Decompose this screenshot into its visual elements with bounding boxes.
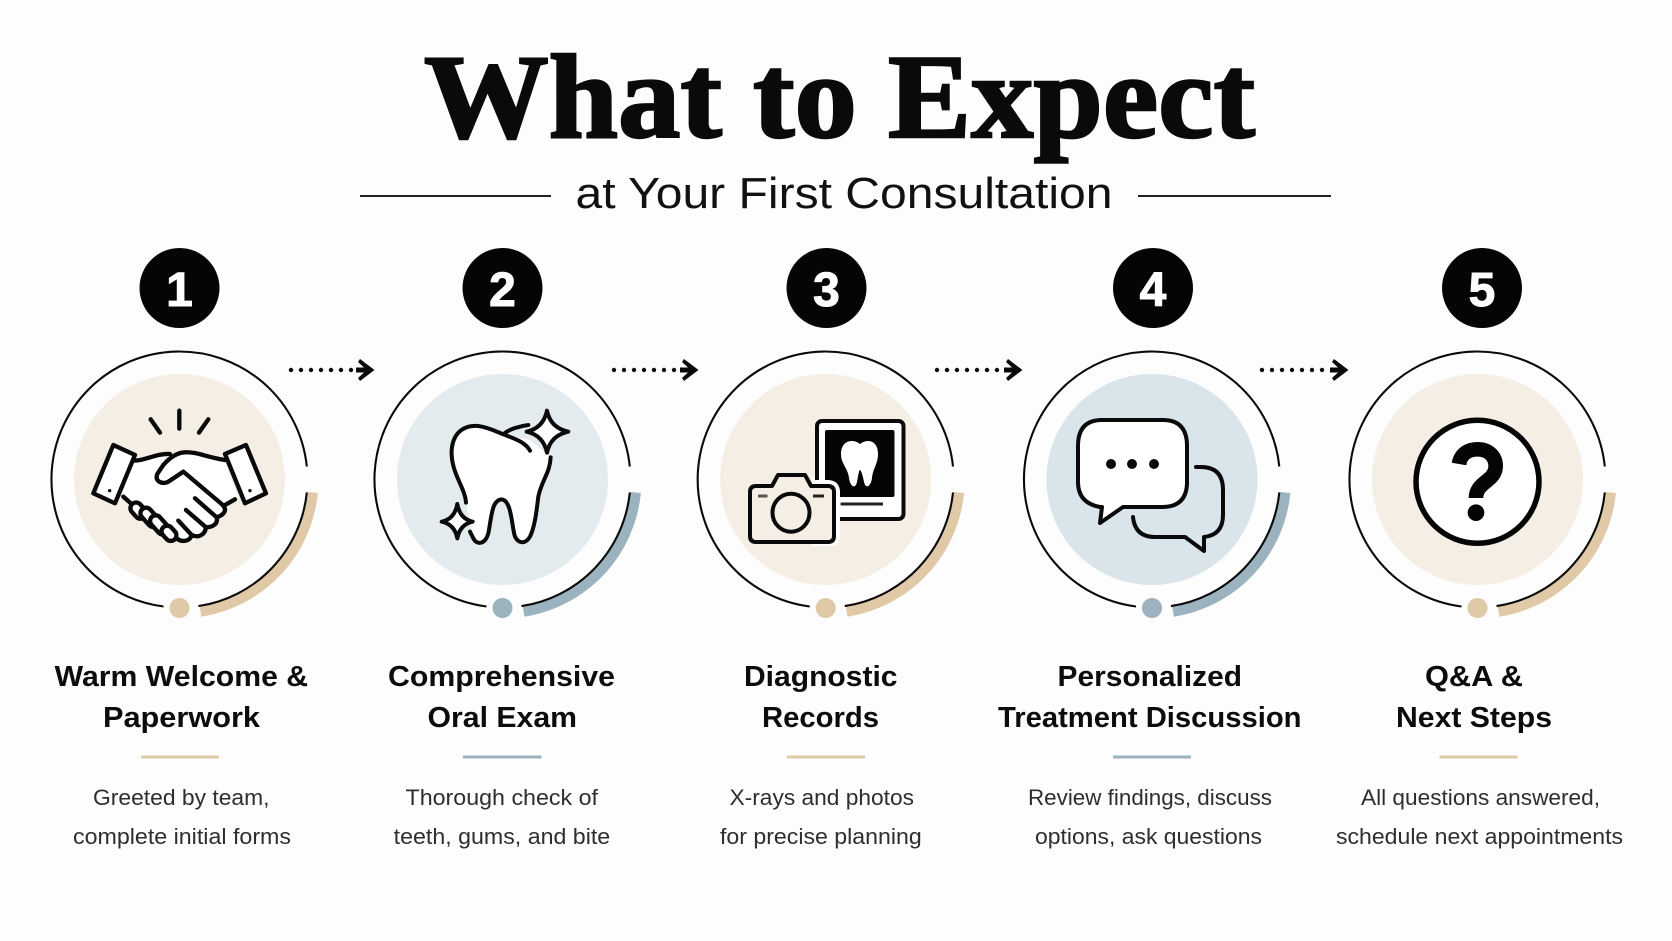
number badge 5: 5 <box>1469 264 1495 317</box>
panel: step 1 <box>51 248 312 849</box>
subtitle with side rules: at Your First Consultation <box>576 169 1112 218</box>
step 3 divider <box>787 756 865 758</box>
step 4 heading <box>998 661 1302 734</box>
number badge 3 <box>786 248 866 328</box>
step 5 heading: Q&A & <box>1425 661 1523 693</box>
step 3 heading: Diagnostic <box>744 661 898 693</box>
step 2 description: teeth, gums, and bite <box>394 824 610 849</box>
step 4 description: Review findings, discuss <box>1028 785 1272 810</box>
step 2 divider <box>463 756 542 758</box>
number badge 2: 2 <box>489 264 516 317</box>
panel: step 3 <box>698 248 959 849</box>
number badge 4: 4 <box>1140 264 1167 317</box>
arrow: step 4 to 5 <box>1262 359 1348 381</box>
step 4 heading: Personalized <box>1058 661 1242 693</box>
step 4 heading: Treatment Discussion <box>998 702 1302 734</box>
progress ring 2 <box>374 351 635 618</box>
panel: step 5 <box>1336 248 1623 849</box>
step 5 description: All questions answered, <box>1361 785 1600 810</box>
arrow: step 2 to 3 <box>614 359 698 381</box>
step 3 heading: Records <box>762 702 879 734</box>
number badge 5 <box>1442 248 1522 328</box>
step 4 description <box>1028 785 1272 849</box>
step 5 divider <box>1440 756 1518 758</box>
step 1 description <box>73 785 291 849</box>
title: What to Expect <box>424 30 1255 163</box>
number badge 1 <box>140 248 220 328</box>
number badge 1: 1 <box>166 264 193 317</box>
panel: step 2 <box>374 248 635 849</box>
icon: handshake <box>93 411 266 543</box>
step 4 divider <box>1113 756 1191 758</box>
step 2 heading <box>388 661 615 734</box>
step 1 heading: Warm Welcome & <box>55 661 308 693</box>
step 5 description: schedule next appointments <box>1336 824 1623 849</box>
step 3 description: for precise planning <box>720 824 922 849</box>
step 3 description: X-rays and photos <box>730 785 914 810</box>
step 4 description: options, ask questions <box>1035 824 1262 849</box>
icon: speech bubbles <box>1078 420 1223 551</box>
arrow: step 3 to 4 <box>937 359 1022 381</box>
panel: step 4 <box>998 248 1302 849</box>
step 5 heading <box>1396 661 1552 734</box>
icon: question mark <box>1416 420 1539 543</box>
arrow: step 1 to 2 <box>291 359 374 381</box>
icon: camera <box>750 475 834 542</box>
step 1 heading <box>55 661 308 734</box>
number badge 3: 3 <box>813 264 840 317</box>
step 1 heading: Paperwork <box>103 702 261 734</box>
step 3 heading <box>744 661 898 734</box>
progress ring 1 <box>51 351 312 618</box>
step 5 description <box>1336 785 1623 849</box>
progress ring 4 <box>1024 351 1285 618</box>
step 5 heading: Next Steps <box>1396 702 1552 734</box>
progress ring 5 <box>1349 351 1610 618</box>
step 2 heading: Oral Exam <box>428 702 577 734</box>
step 1 description: Greeted by team, <box>93 785 270 810</box>
step 2 heading: Comprehensive <box>388 661 615 693</box>
progress ring 3 <box>698 351 959 618</box>
step 1 divider <box>141 756 219 758</box>
icon: x-ray film <box>817 421 904 519</box>
icon: tooth with sparkles <box>442 411 568 543</box>
step 2 description: Thorough check of <box>406 785 599 810</box>
number badge 2 <box>462 248 542 328</box>
step 1 description: complete initial forms <box>73 824 291 849</box>
step 3 description <box>720 785 922 849</box>
step 2 description <box>394 785 610 849</box>
number badge 4 <box>1113 248 1193 328</box>
